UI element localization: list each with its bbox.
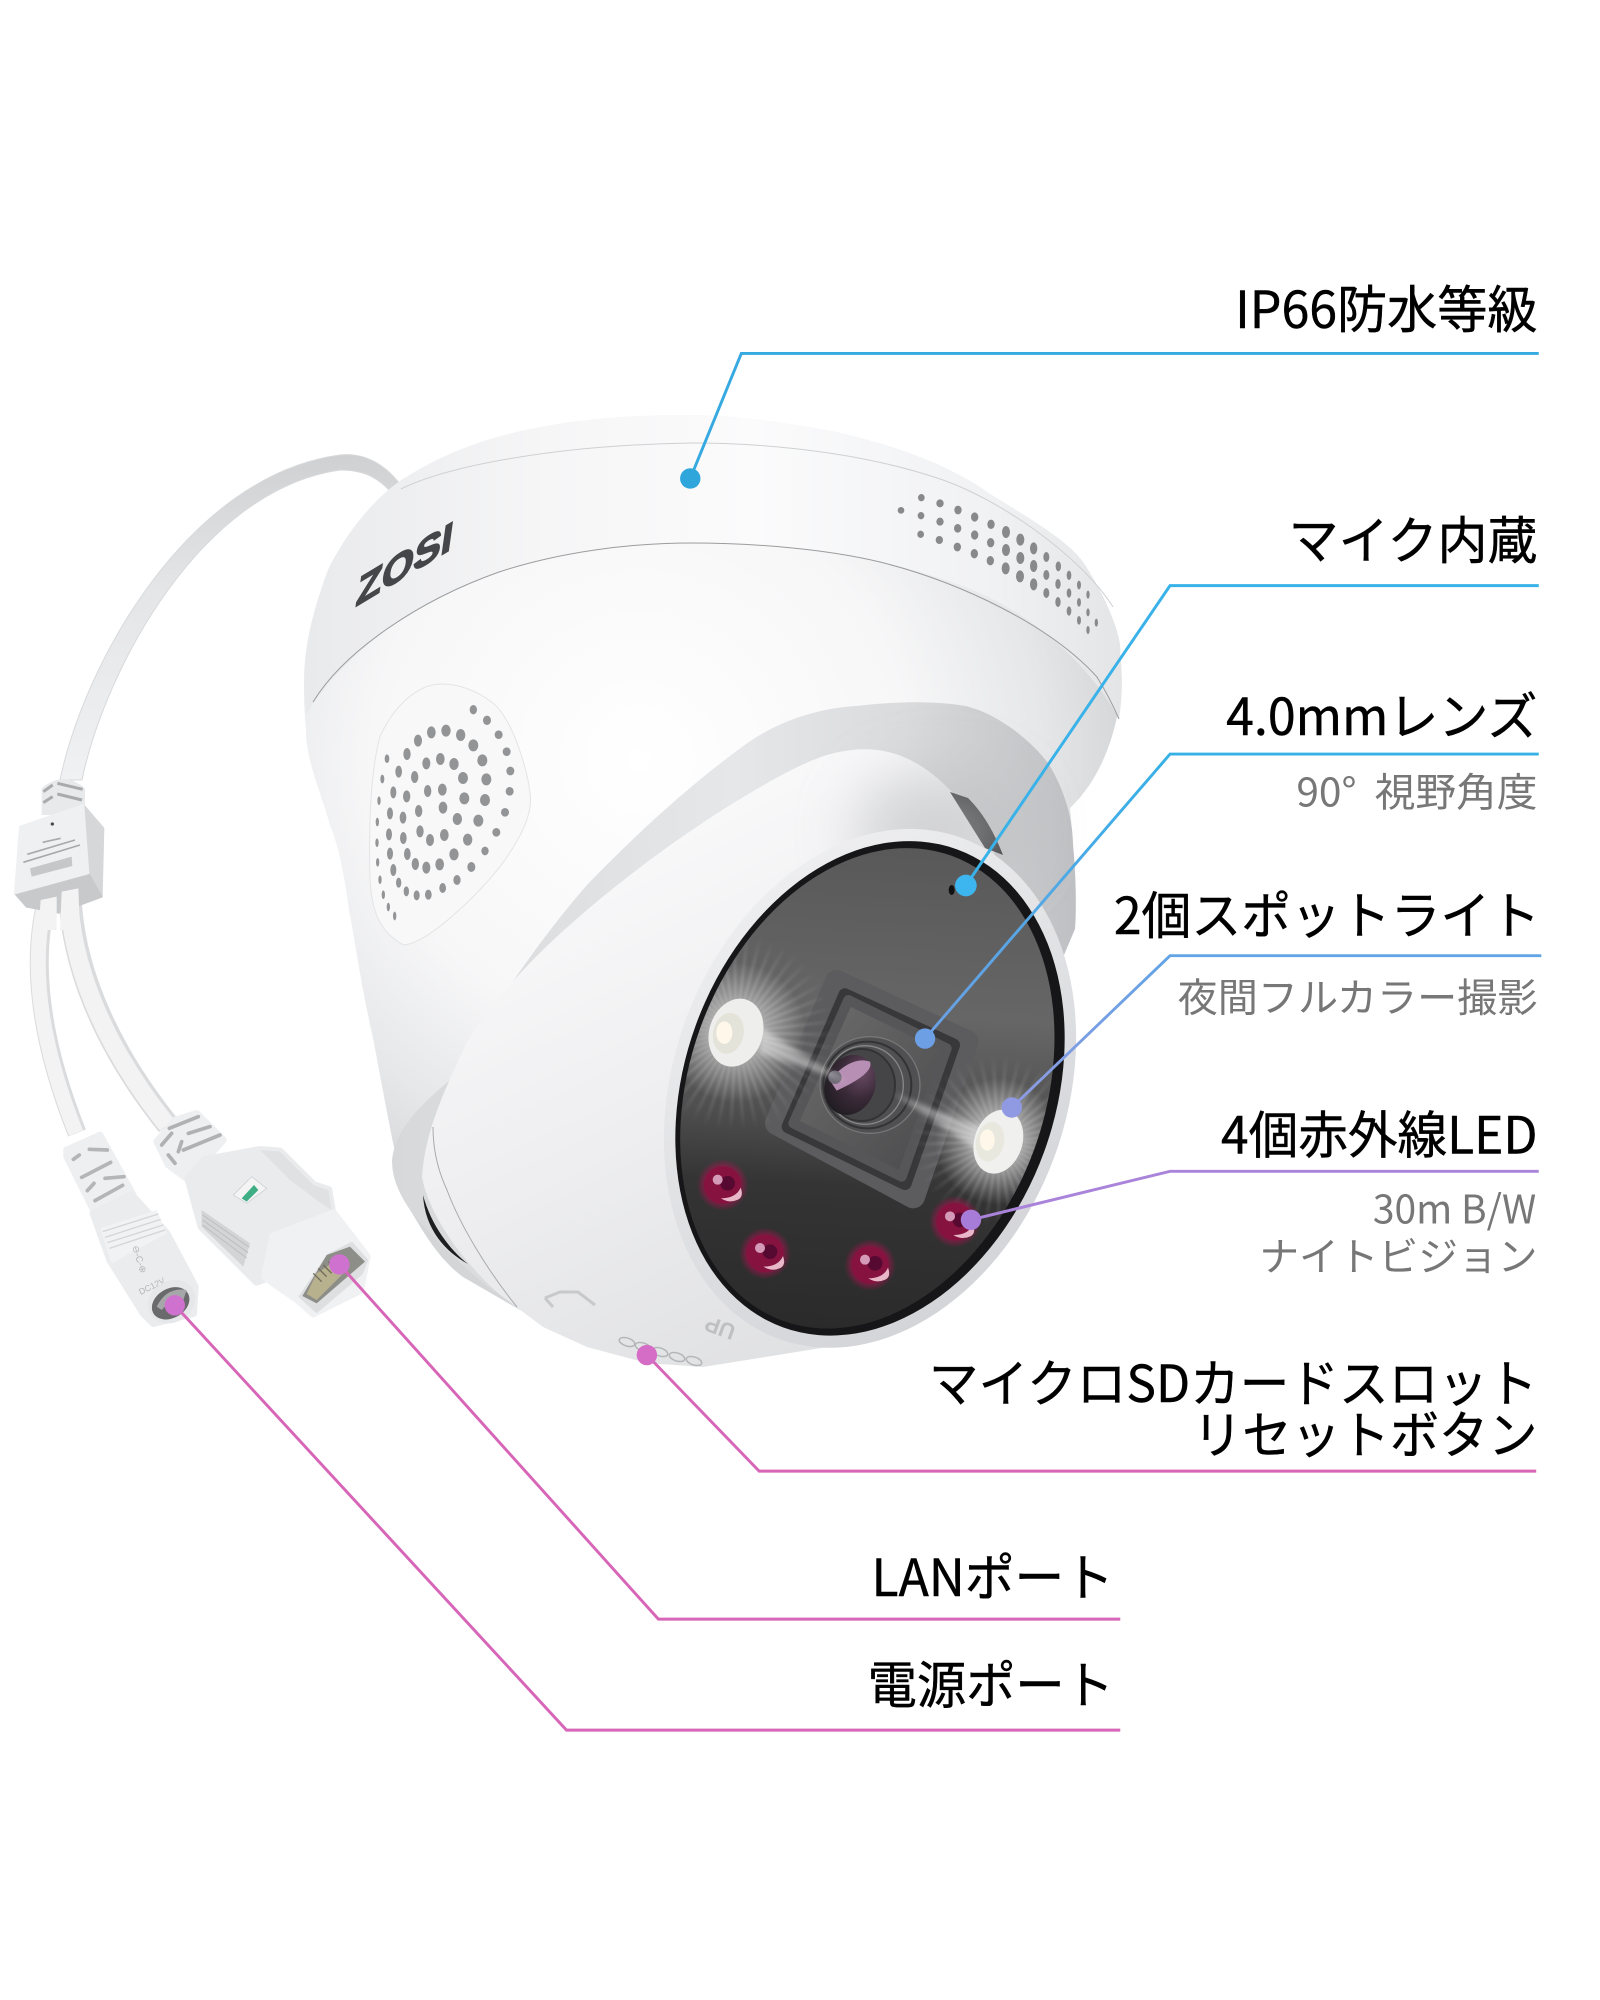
- callout: 4.0mm lens: 90° 視野角度: [1296, 761, 1537, 818]
- left spotlight: [666, 963, 806, 1103]
- bottom markings: UP: [701, 1311, 739, 1345]
- side speaker patch: [370, 684, 531, 945]
- callout: 4 infrared LEDs: [961, 1094, 1539, 1283]
- callout: 2 spotlights: [1002, 875, 1541, 1118]
- collar grooves: [43, 783, 83, 803]
- callout: microSD slot and reset button: リセットボタン: [1193, 1394, 1537, 1468]
- power connector strain relief: [67, 1135, 133, 1213]
- splitter front face: [15, 805, 88, 893]
- callout: 4 infrared LEDs: 30m B/W: [1373, 1179, 1536, 1236]
- lens black rim: [609, 786, 1131, 1391]
- ball shading near lens: [855, 770, 1025, 890]
- side speaker: [370, 684, 531, 945]
- LAN connector nose: [265, 1213, 367, 1313]
- callout: power port: [165, 1295, 1120, 1730]
- camera housing silhouette: [304, 415, 1122, 1345]
- LAN connector strain relief: [157, 1113, 223, 1180]
- light streaks across module: [760, 1027, 980, 1150]
- dome seam lines: [313, 443, 1119, 719]
- callout: LAN port: LANポート: [871, 1537, 1114, 1611]
- callout: LAN port: [329, 1254, 1120, 1619]
- callout: IP66 waterproof: IP66防水等級: [1235, 269, 1537, 343]
- left branch cable: [38, 895, 77, 1133]
- power connector barrel: DC12V: [137, 1275, 167, 1297]
- power connector barrel: [93, 1195, 203, 1332]
- LAN connector body: [188, 1150, 332, 1282]
- lens face: [680, 848, 1054, 1328]
- splitter collar: [42, 779, 85, 815]
- power connector barrel: ⊖-C-⊕: [130, 1244, 148, 1274]
- cable assembly: [15, 455, 403, 1332]
- right branch cable: [69, 895, 168, 1125]
- callout: 4 infrared LEDs: 4個赤外線LED: [1221, 1094, 1537, 1168]
- callout: IP66 waterproof: [680, 269, 1539, 489]
- splitter side face: [83, 805, 103, 897]
- ball seam: [433, 1127, 517, 1307]
- splitter underside: [15, 873, 102, 913]
- bottom markings: [545, 1292, 739, 1367]
- microphone hole: [949, 885, 955, 895]
- callout: microSD slot and reset button: マイクロSDカードスロット: [929, 1343, 1537, 1417]
- ZOSI logo: ZOSI: [354, 512, 456, 616]
- callout: microSD slot and reset button: [637, 1343, 1537, 1471]
- callout: 4 infrared LEDs: ナイトビジョン: [1259, 1226, 1537, 1283]
- camera: [304, 415, 1146, 1406]
- side speaker holes: [375, 705, 514, 920]
- callout: 4.0mm lens: [915, 676, 1539, 1049]
- LAN status LED window: [233, 1177, 267, 1203]
- lens assembly: [664, 829, 1076, 1348]
- branch stubs: [38, 888, 80, 930]
- ball housing: [422, 749, 1050, 1367]
- splitter window: [30, 857, 72, 877]
- callout: 4.0mm lens: 4.0mmレンズ: [1226, 676, 1537, 750]
- top speaker grille: [898, 494, 1098, 634]
- infrared LEDs: [697, 1159, 981, 1291]
- lens bezel ring: [594, 770, 1146, 1406]
- callout: built-in microphone: [955, 500, 1539, 896]
- right spotlight: [935, 1078, 1062, 1205]
- gimbal socket: [392, 702, 1076, 1297]
- RJ45 port: [300, 1243, 367, 1312]
- callout: power port: 電源ポート: [868, 1644, 1114, 1718]
- callout: 2 spotlights: 2個スポットライト: [1114, 875, 1540, 949]
- connectors: [67, 1113, 367, 1332]
- camera lens: [816, 1037, 920, 1133]
- dark gap behind ball: [950, 792, 1003, 855]
- callout: built-in microphone: マイク内蔵: [1289, 500, 1537, 574]
- lower dark gap: [423, 1195, 468, 1264]
- main cable: [60, 455, 403, 780]
- lens module: [777, 982, 967, 1197]
- top dome cap: [304, 415, 1122, 719]
- callout: 2 spotlights: 夜間フルカラー撮影: [1178, 967, 1537, 1024]
- splitter markings: [23, 838, 80, 862]
- splitter: [15, 779, 103, 930]
